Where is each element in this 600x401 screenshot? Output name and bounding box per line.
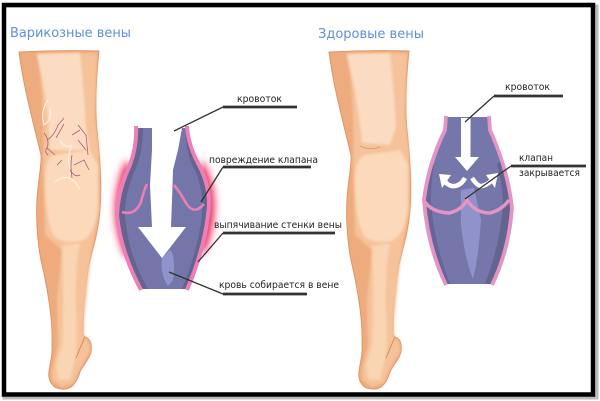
right healthy leg (329, 51, 411, 389)
label: valve closes: клапан (519, 153, 553, 164)
label: vein wall bulging: выпячивание стенки вены (214, 220, 342, 231)
vein body (425, 117, 511, 284)
label: vein wall bulging (198, 220, 342, 262)
pink vein wall (424, 116, 446, 285)
white downward arrow (455, 118, 479, 171)
label: valve closes (465, 153, 586, 199)
title: varicose veins: Варикозные вены (10, 26, 131, 41)
label: blood flow (varicose): кровоток (237, 94, 282, 105)
varicose vein diagram (115, 126, 215, 290)
label: blood flow (healthy) (465, 82, 563, 122)
label: valve closes: закрывается (519, 168, 580, 179)
left leg with varicose veins (19, 51, 101, 389)
red inflammation glow (115, 160, 215, 258)
label: blood pools in vein: кровь собирается в вене (219, 280, 339, 291)
label: valve damage: повреждение клапана (209, 155, 318, 166)
closed valve (425, 200, 509, 213)
label: blood flow (varicose) (174, 94, 297, 131)
label: valve damage (201, 155, 318, 202)
title: healthy veins: Здоровые вены (318, 27, 424, 42)
label: blood pools in vein (169, 272, 339, 294)
damaged valves (122, 184, 147, 213)
white curled arrows (439, 173, 498, 188)
white blood flow arrow (138, 128, 186, 258)
label: blood flow (healthy): кровоток (505, 82, 550, 93)
vein body (118, 128, 209, 289)
pink vein wall (117, 126, 141, 290)
spider veins (44, 118, 89, 178)
healthy vein diagram (424, 116, 512, 285)
